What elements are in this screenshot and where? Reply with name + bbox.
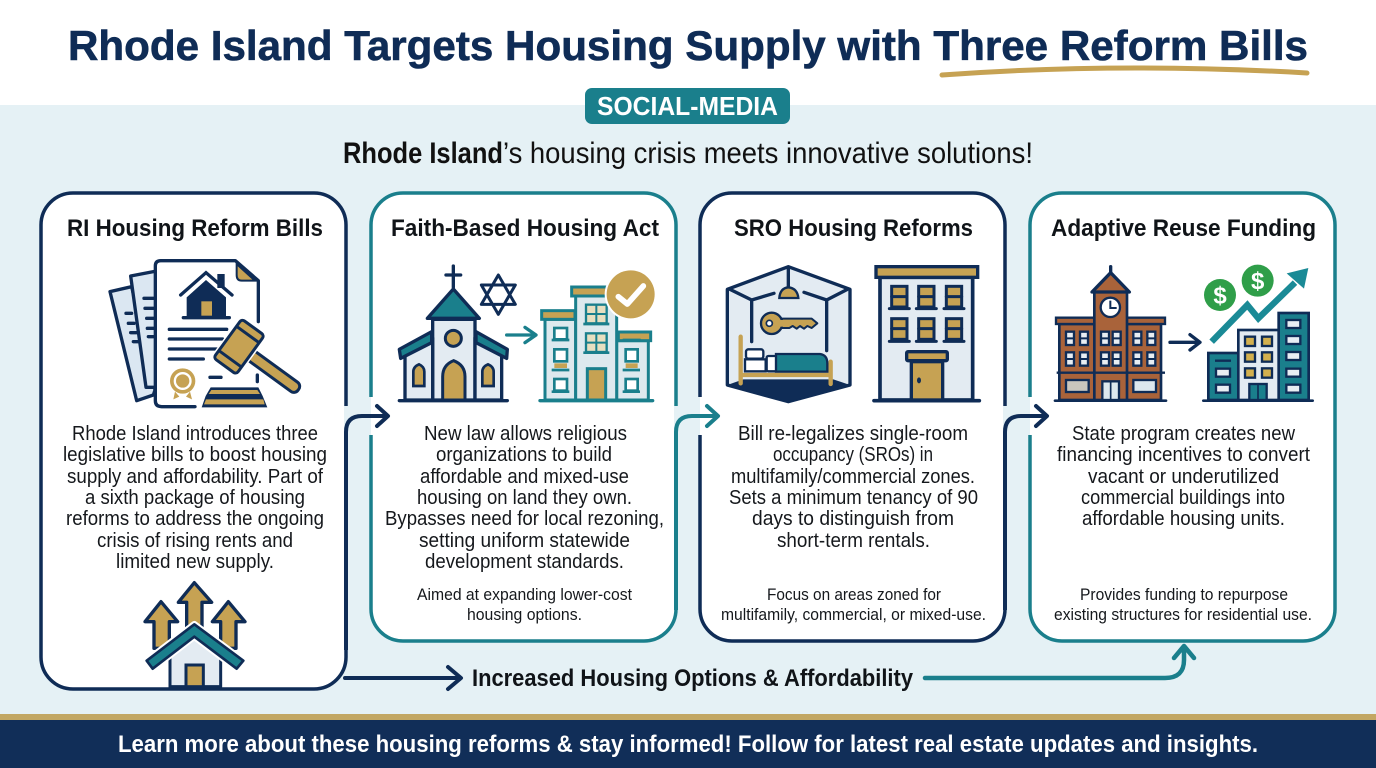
panel: SRO Housing Reforms	[700, 193, 1005, 641]
body text: Bypasses need for local rezoning,	[385, 507, 664, 530]
note text: Aimed at expanding lower-cost	[417, 585, 632, 604]
body text: reforms to address the ongoing	[66, 507, 324, 530]
arrow: panel 2 to panel 3	[674, 397, 719, 610]
heading: SRO Housing Reforms: SRO Housing Reforms	[734, 215, 973, 242]
body text: multifamily/commercial zones.	[731, 465, 975, 488]
body text	[63, 422, 327, 573]
body text	[1057, 422, 1310, 530]
body text: limited new supply.	[116, 550, 274, 573]
subheading: Rhode Island	[343, 137, 503, 170]
body text: Rhode Island introduces three	[72, 422, 318, 445]
note text	[721, 585, 986, 624]
body text: organizations to build	[436, 443, 612, 466]
body text: State program creates new	[1072, 422, 1295, 445]
body text: setting uniform statewide	[419, 529, 630, 552]
panel: Adaptive Reuse Funding	[1030, 193, 1335, 641]
body text: Bill re-legalizes single-room	[738, 422, 968, 445]
body text: financing incentives to convert	[1057, 443, 1310, 466]
subheading: ’s housing crisis meets innovative solutions!	[503, 137, 1033, 170]
body text: Sets a minimum tenancy of 90	[729, 486, 978, 509]
arrow: panel 1 to panel 2	[344, 397, 390, 650]
arrow: outcome to panel 4	[925, 646, 1194, 678]
body text: legislative bills to boost housing	[63, 443, 327, 466]
body text: New law allows religious	[424, 422, 627, 445]
tag: social-media: SOCIAL-MEDIA	[597, 91, 778, 121]
heading: RI Housing Reform Bills: RI Housing Reform Bills	[67, 215, 323, 242]
body text: commercial buildings into	[1081, 486, 1285, 509]
body text: crisis of rising rents and	[97, 529, 293, 552]
title: Rhode Island Targets Housing Supply with Three Reform Bills	[68, 22, 1308, 69]
footer banner: Learn more about these housing reforms & stay informed! Follow for latest real estate updates and insights.	[118, 731, 1258, 758]
body text: affordable and mixed-use	[420, 465, 629, 488]
icon: bill documents with gavel	[110, 261, 312, 409]
note text: Focus on areas zoned for	[767, 585, 941, 604]
icon: old brick building converted with funding: $	[1251, 268, 1264, 295]
note text: housing options.	[467, 605, 582, 624]
note text: Provides funding to repurpose	[1080, 585, 1288, 604]
icon: old brick building converted with funding: $	[1213, 282, 1227, 309]
panel: RI Housing Reform Bills	[41, 193, 346, 689]
note text	[417, 585, 632, 624]
footer banner	[0, 714, 1376, 768]
panel: Faith-Based Housing Act	[371, 193, 676, 641]
icon: house with rising arrows	[145, 583, 245, 687]
note text	[1054, 585, 1312, 624]
body text: occupancy (SROs) in	[773, 443, 933, 466]
body text	[729, 422, 978, 552]
body text: housing on land they own.	[417, 486, 632, 509]
icon: single room with key and SRO building	[727, 267, 979, 402]
body text: development standards.	[425, 550, 624, 573]
body text: supply and affordability. Part of	[67, 465, 323, 488]
note text: multifamily, commercial, or mixed-use.	[721, 605, 986, 624]
body text: affordable housing units.	[1082, 507, 1285, 530]
body text	[385, 422, 664, 573]
body text: a sixth package of housing	[85, 486, 305, 509]
icon: old brick building converted with funding	[1055, 265, 1313, 401]
note text: existing structures for residential use.	[1054, 605, 1312, 624]
arrow: panel 1 to outcome	[345, 667, 461, 689]
outcome label: Increased Housing Options & Affordability	[472, 665, 913, 692]
arrow: panel 3 to panel 4	[1003, 397, 1049, 610]
heading: Faith-Based Housing Act: Faith-Based Housing Act	[391, 215, 659, 242]
icon: church to apartment building	[399, 266, 657, 401]
heading: Adaptive Reuse Funding: Adaptive Reuse Funding	[1051, 215, 1316, 242]
body text: days to distinguish from	[752, 507, 954, 530]
body text: vacant or underutilized	[1088, 465, 1279, 488]
body text: short-term rentals.	[777, 529, 930, 552]
